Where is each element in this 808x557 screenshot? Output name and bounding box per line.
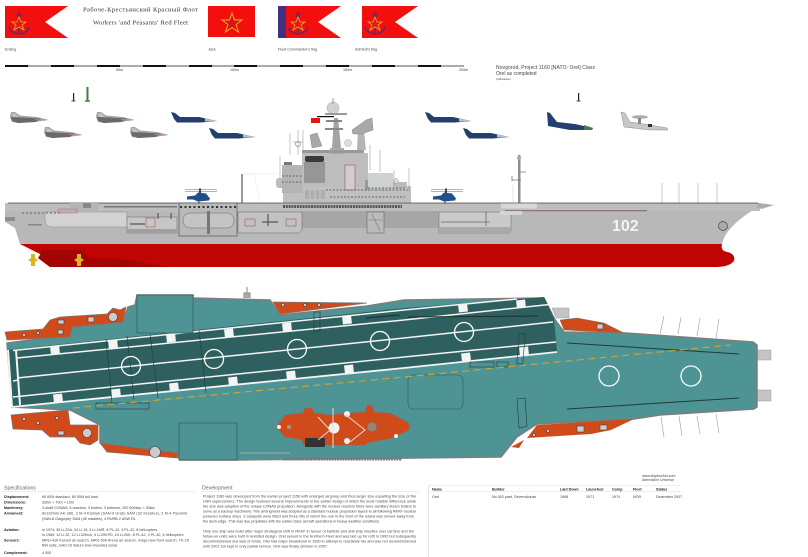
spec rows: Complement: — [4, 551, 28, 555]
spec rows: BW suite, GAS-15 Saturn bow-mounted sonar — [42, 544, 118, 548]
spec rows: Machinery: — [4, 506, 23, 510]
spec rows: Aviation: — [4, 528, 20, 532]
heading: development: Development — [202, 486, 233, 492]
spec rows — [4, 495, 189, 555]
table row: Orel: NOR — [633, 495, 642, 499]
credit — [642, 474, 676, 482]
credit: Alternative Universe — [642, 478, 674, 482]
title: Workers 'and Peasants' Red Fleet — [93, 20, 188, 26]
lift outlines — [137, 295, 237, 460]
hull above waterline — [5, 203, 774, 244]
aircraft: large blue jet — [547, 112, 593, 130]
development text: decommissioned due lack of funds. Orel had major breakdown in 1990 in attempt to reactivate her and was not recommissioned — [203, 540, 416, 544]
lift outline: forward — [408, 375, 463, 409]
flag: fleet commander — [278, 6, 341, 38]
flag captions: Jack — [208, 48, 216, 52]
panel: service table — [428, 486, 682, 557]
table header: Name — [432, 488, 442, 492]
table row: Orel: No.402 yard, Severodvinsk — [492, 495, 536, 499]
title: Рабоче-Крестьянский Красный Флот — [83, 6, 198, 14]
flag: admiral — [362, 6, 418, 38]
development text: follow-on units were built in revisited design. Orel served in the Northern Fleet and was laid up for refit in 1992 but subsquently — [203, 534, 416, 538]
development text: USN supercarriers. The design featured several improvements to the earlier design of which the most notable difference aside — [203, 500, 416, 504]
spec rows: Dimensions: — [4, 500, 26, 504]
hull bay: aft — [127, 213, 177, 233]
panel: development — [200, 486, 418, 548]
sponson: bow top — [560, 318, 624, 333]
bow mast — [512, 155, 526, 203]
bow antennas — [662, 183, 717, 203]
orange dashed centre line — [73, 345, 731, 408]
icon: missiles — [72, 87, 580, 101]
development text: Only one ship was build after major strategical shift in RKKF in favour of ballistic and anti-ship missiles over carriers and the — [203, 530, 414, 534]
hull bay: side lift — [367, 212, 384, 233]
table row: Orel: 1974 — [612, 495, 620, 499]
aircraft: blue fighters — [171, 112, 509, 138]
spec rows: in 1974: 36 Li-20A, 24 Li-15, 4 Li-1MR, 8 PL-42, 4 PL-42, 8 helicopters — [42, 528, 157, 532]
table header: Status — [656, 488, 667, 492]
table row: Orel: 1971 — [586, 495, 594, 499]
sponson: bow bottom — [511, 419, 634, 448]
development text — [203, 494, 417, 548]
gallery strip — [283, 205, 402, 208]
hull dark band — [302, 211, 439, 228]
helipad circles — [122, 322, 701, 386]
teal deck — [7, 295, 757, 460]
stern section — [5, 203, 127, 227]
propellers — [28, 254, 84, 266]
flight deck edge — [5, 202, 774, 211]
credit: www.shipbucket.com — [642, 474, 676, 478]
development text: serve as a backup machinery. This arrangment was adopted as a standard nuclear propulsion layout to all following RKKF nuclear — [203, 510, 417, 514]
table header: Laid Down — [560, 488, 579, 492]
bow nubs — [552, 308, 771, 401]
superstructure island — [276, 98, 411, 203]
bottom edge rail — [240, 452, 290, 454]
development text: the deck-edge. This was due propleties with the earlier class aircraft operations in heavy weather conditions. — [203, 520, 380, 524]
flag captions — [5, 48, 377, 52]
catapult lines and cables — [96, 312, 538, 428]
aircraft: grey fighters — [10, 112, 169, 138]
dark stern shading — [38, 250, 165, 267]
red underwater hull — [20, 244, 734, 267]
spec rows: 3-shaft CONAS: 6 reactors, 3 boilers, 3 turbines, 200 000shp = 30kts — [42, 506, 155, 510]
island plan — [276, 405, 409, 448]
flag captions: Ensing — [5, 48, 16, 52]
table header: Launched — [586, 488, 604, 492]
mast stub — [244, 287, 250, 298]
ship caption: (Indicative) — [496, 77, 511, 81]
scale bar: 150m — [343, 68, 352, 72]
development text: powered surface ships. 3 catapults were fitted and three lifts of which the one in the front of the island was moved away from — [203, 514, 414, 518]
flag captions: Admiral's flag — [355, 48, 377, 52]
spec rows: Sensors: — [4, 538, 20, 542]
angled deck markings — [8, 299, 557, 407]
angled deck — [7, 297, 557, 407]
gangway — [283, 458, 402, 460]
table row: Orel: Orel — [432, 495, 439, 499]
development text: until 2001 but kept in only partial service. Orel was finally stricken in 2007. — [203, 544, 328, 548]
hawse pipe — [718, 222, 728, 230]
development text: Project 1160 was developed from the earlier project 1156 with enlarged airgroup and thus larger size equalling the size of the — [203, 494, 416, 498]
helicopters — [185, 188, 463, 204]
scale bar — [5, 65, 468, 72]
spec rows: MRU-410 Kurveil air search, MRU-500 Arena air search, Volga new front search, TK-15 — [42, 538, 189, 542]
flag captions: Fleet Commander's flag — [278, 48, 317, 52]
sponson: mid top — [273, 302, 367, 314]
spec rows: Armament: — [4, 512, 23, 516]
table header — [432, 488, 667, 492]
spec rows: in 1984: 12 Li-32, 12 Li-32KnA, 4 Li-20KPD, 24 Li-20K, 8 PL-42, 4 PL-42, 4 helicopters — [42, 533, 184, 537]
plan view of flight deck — [5, 287, 771, 460]
sponson: aft bottom — [100, 443, 178, 458]
bow ramp rails — [567, 343, 739, 409]
bow rods — [660, 316, 719, 437]
spec rows: 330m × 70m × 10m — [42, 500, 74, 504]
flag: jack — [208, 6, 255, 37]
sponson: stern bottom — [11, 410, 98, 445]
spec rows: (SAN-8 Gargoyle) SAM (48 missiles), 4 RURB-2 ASW RL — [42, 517, 136, 521]
flag: ensign — [5, 6, 68, 38]
hull bay: forward — [439, 211, 522, 233]
sponson: stern top — [5, 307, 126, 340]
spec rows: 4 000 — [42, 551, 51, 555]
table header: Comp — [612, 488, 623, 492]
aircraft: AWACS — [621, 112, 668, 130]
hull number: 102 — [612, 218, 639, 235]
hull bay: midships — [238, 212, 302, 233]
table row: Orel: December 2007 — [656, 495, 682, 499]
scale bar: 200m — [459, 68, 468, 72]
ship caption: Orel as completed — [496, 71, 537, 77]
spec rows: 60 000t standard, 80 000t full load — [42, 495, 98, 499]
scale bar: 100m — [230, 68, 239, 72]
table row: Orel — [432, 495, 682, 499]
table header: Fleet — [633, 488, 642, 492]
side view of ship — [5, 98, 774, 267]
sponson mounts — [22, 304, 607, 458]
panel: specifications — [2, 486, 195, 555]
ship caption: Novgorod, Project 1160 [NATO: Orel] Class — [496, 65, 596, 71]
spec rows: Displacement: — [4, 495, 29, 499]
aft mast — [241, 174, 277, 203]
hull bay: boat — [179, 203, 237, 236]
table row: Orel: 1968 — [560, 495, 568, 499]
scale bar: 50m — [116, 68, 123, 72]
development text: the size was adoption of the unique CONAS propulsion. Alongside with the nuclear reactors there were auxiliary steam boilers to — [203, 504, 416, 508]
ship caption — [496, 65, 596, 81]
heading: specifications: Specifications — [4, 486, 36, 492]
title — [83, 6, 198, 26]
spec rows: 8x130mm AK-280, 2 M-II Kalmyk (SAN-9 Grab) SAM (32 missiles), 2 M-4 Pyramid — [42, 512, 187, 516]
table header: Builder — [492, 488, 505, 492]
